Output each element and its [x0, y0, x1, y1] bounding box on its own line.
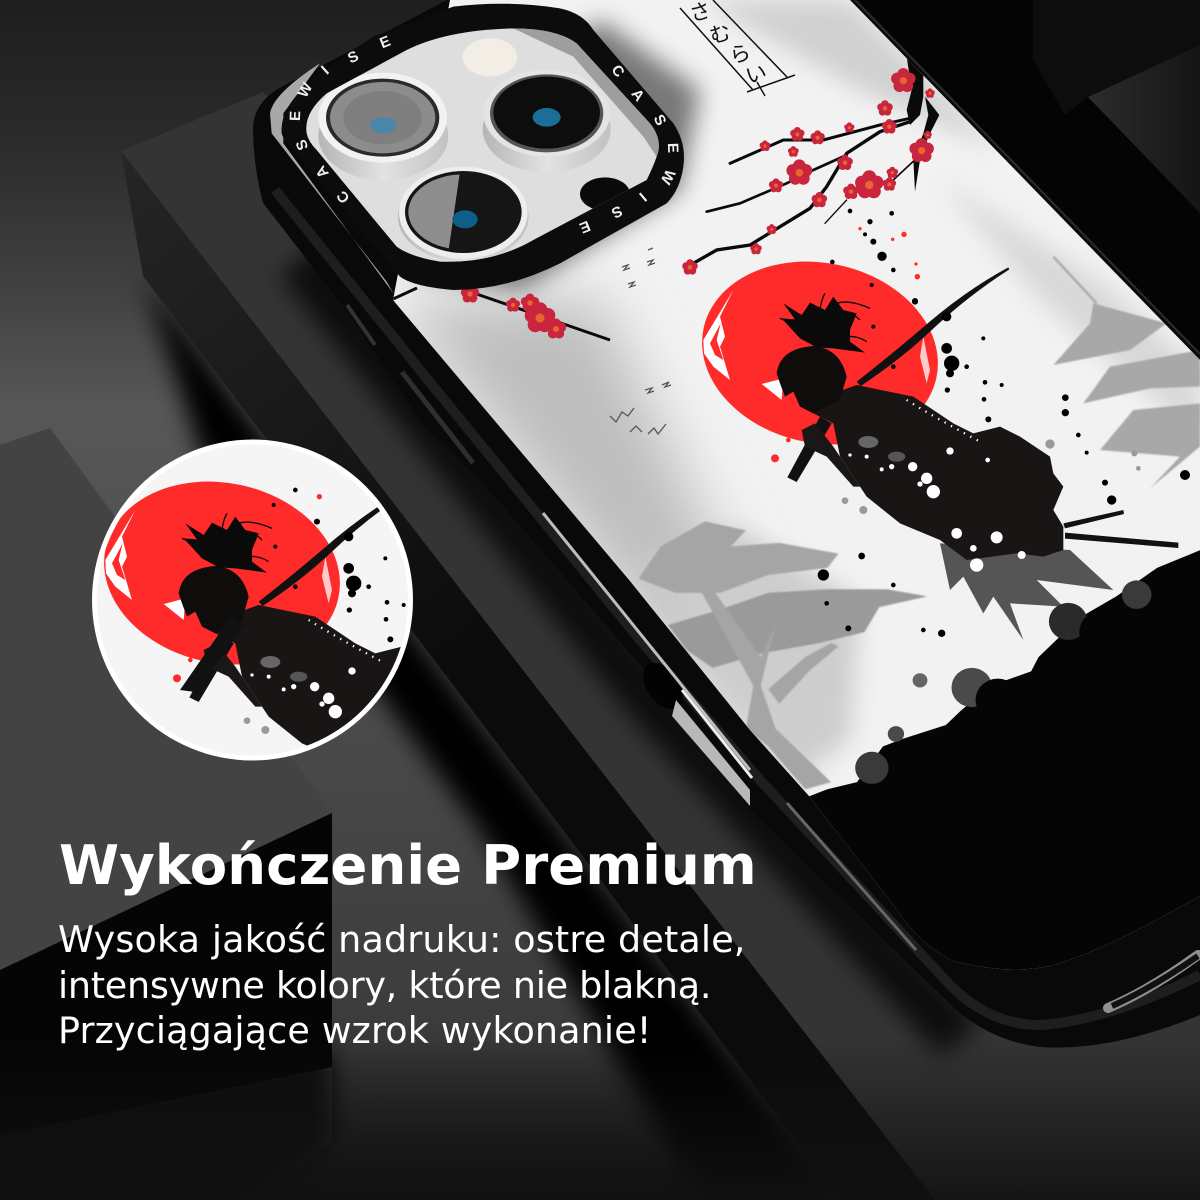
camera island [282, 4, 684, 290]
brand lettering on ring: E [377, 33, 393, 52]
main cherry branches [682, 57, 939, 304]
microphone hole [580, 177, 630, 211]
flash [463, 38, 517, 76]
grey case strip [270, 63, 393, 293]
body copy: intensywne kolory, które nie blakną. [58, 964, 711, 1006]
brand lettering on ring: S [650, 112, 669, 129]
phone case [253, 0, 1200, 1048]
brand lettering on ring: I [318, 63, 333, 78]
misty tree [639, 521, 927, 789]
detail magnifier circle [92, 440, 413, 760]
phone shadow on platform [300, 260, 960, 1040]
lens two [483, 70, 611, 173]
edge line [855, 0, 1200, 354]
charging port [1108, 955, 1198, 1008]
glossy rim highlight [543, 513, 916, 950]
hole by power button [635, 656, 691, 716]
platform shadow [143, 276, 840, 1200]
island shadow [420, 20, 700, 290]
body copy [58, 918, 746, 1052]
birds [610, 248, 671, 434]
brand lettering on ring: E [664, 143, 681, 153]
brand lettering on ring: S [345, 48, 361, 67]
right background blocks [850, 0, 1200, 420]
kanji label: ら [727, 41, 753, 69]
brand lettering on ring: A [628, 86, 648, 105]
brand lettering on ring: S [609, 202, 625, 221]
brand lettering on ring: W [656, 167, 678, 188]
lens three [398, 167, 529, 262]
volume button [402, 372, 473, 463]
brand lettering on ring: E [577, 217, 593, 236]
dark hillside [809, 550, 1200, 970]
left block top face [0, 428, 332, 970]
kanji label [680, 0, 795, 96]
brand lettering on ring: C [608, 62, 628, 81]
samurai and sun [685, 240, 1190, 640]
heading: Wykończenie Premium [59, 833, 757, 897]
power button [672, 700, 750, 806]
lower cherry branch [393, 285, 610, 340]
printed artwork [393, 0, 1200, 970]
brand lettering on ring: A [312, 162, 332, 181]
lens surround ring [282, 4, 684, 290]
lens one [318, 73, 448, 180]
kanji label: む [707, 21, 733, 49]
brand lettering on ring: C [333, 187, 353, 206]
platform side face [121, 151, 935, 1200]
side button small [347, 305, 375, 345]
brand lettering on ring: S [293, 137, 312, 153]
body copy: Przyciągające wzrok wykonanie! [58, 1009, 652, 1052]
body copy: Wysoka jakość nadruku: ostre detale, [58, 918, 746, 961]
brand lettering on ring: I [636, 189, 650, 204]
brand lettering on ring: E [287, 111, 304, 121]
kanji label: い [743, 61, 769, 89]
distant pagoda [1053, 257, 1200, 488]
brand lettering on ring: W [295, 79, 317, 101]
left block front face [0, 813, 332, 1135]
camera glass window [306, 28, 659, 262]
left block shadow [0, 1050, 332, 1200]
bottom vignette [0, 1040, 1200, 1200]
paper shading [393, 0, 1200, 780]
brand lettering on ring [287, 33, 681, 236]
